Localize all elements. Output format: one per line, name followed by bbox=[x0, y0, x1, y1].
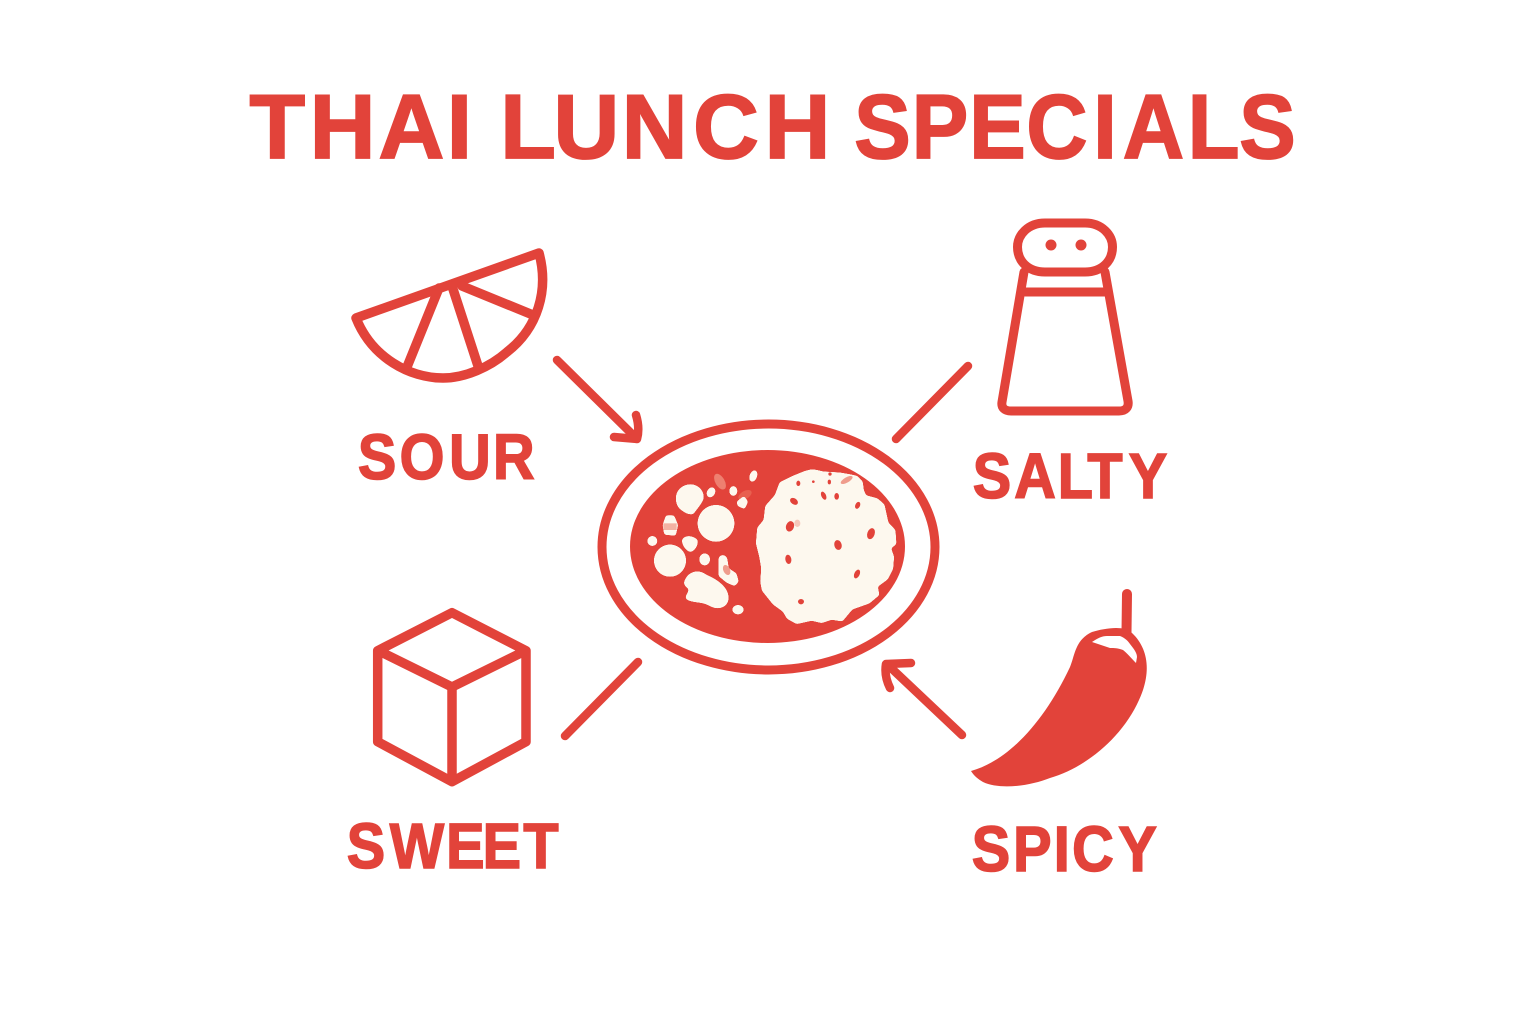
icon: lime wedge bbox=[356, 253, 543, 378]
title: SPECIALS bbox=[854, 75, 1296, 178]
rice and curry pieces bbox=[647, 469, 896, 624]
rice mound bbox=[756, 469, 896, 624]
rice tints bbox=[840, 474, 854, 486]
arrow: spicy to plate bbox=[886, 663, 962, 735]
icon: salt shaker bbox=[1002, 223, 1128, 411]
connector: sweet to plate bbox=[565, 662, 638, 736]
title bbox=[250, 75, 1296, 178]
label: sour: SOUR bbox=[358, 421, 535, 493]
connector: salty to plate bbox=[896, 366, 968, 439]
curry pieces bbox=[647, 469, 759, 614]
rice specks bbox=[784, 472, 876, 604]
icon: sugar cube bbox=[378, 613, 526, 782]
curry smears bbox=[712, 472, 728, 492]
arrow: sour to plate bbox=[557, 360, 638, 439]
title: THAI LUNCH bbox=[250, 77, 830, 178]
label: salty: SALTY bbox=[973, 440, 1167, 512]
label: sweet: SWEET bbox=[347, 810, 559, 882]
label: spicy: SPICY bbox=[972, 813, 1157, 885]
icon: chili pepper bbox=[971, 594, 1147, 786]
icon: plate of curry and rice bbox=[602, 424, 935, 670]
curry tints bbox=[663, 523, 677, 530]
